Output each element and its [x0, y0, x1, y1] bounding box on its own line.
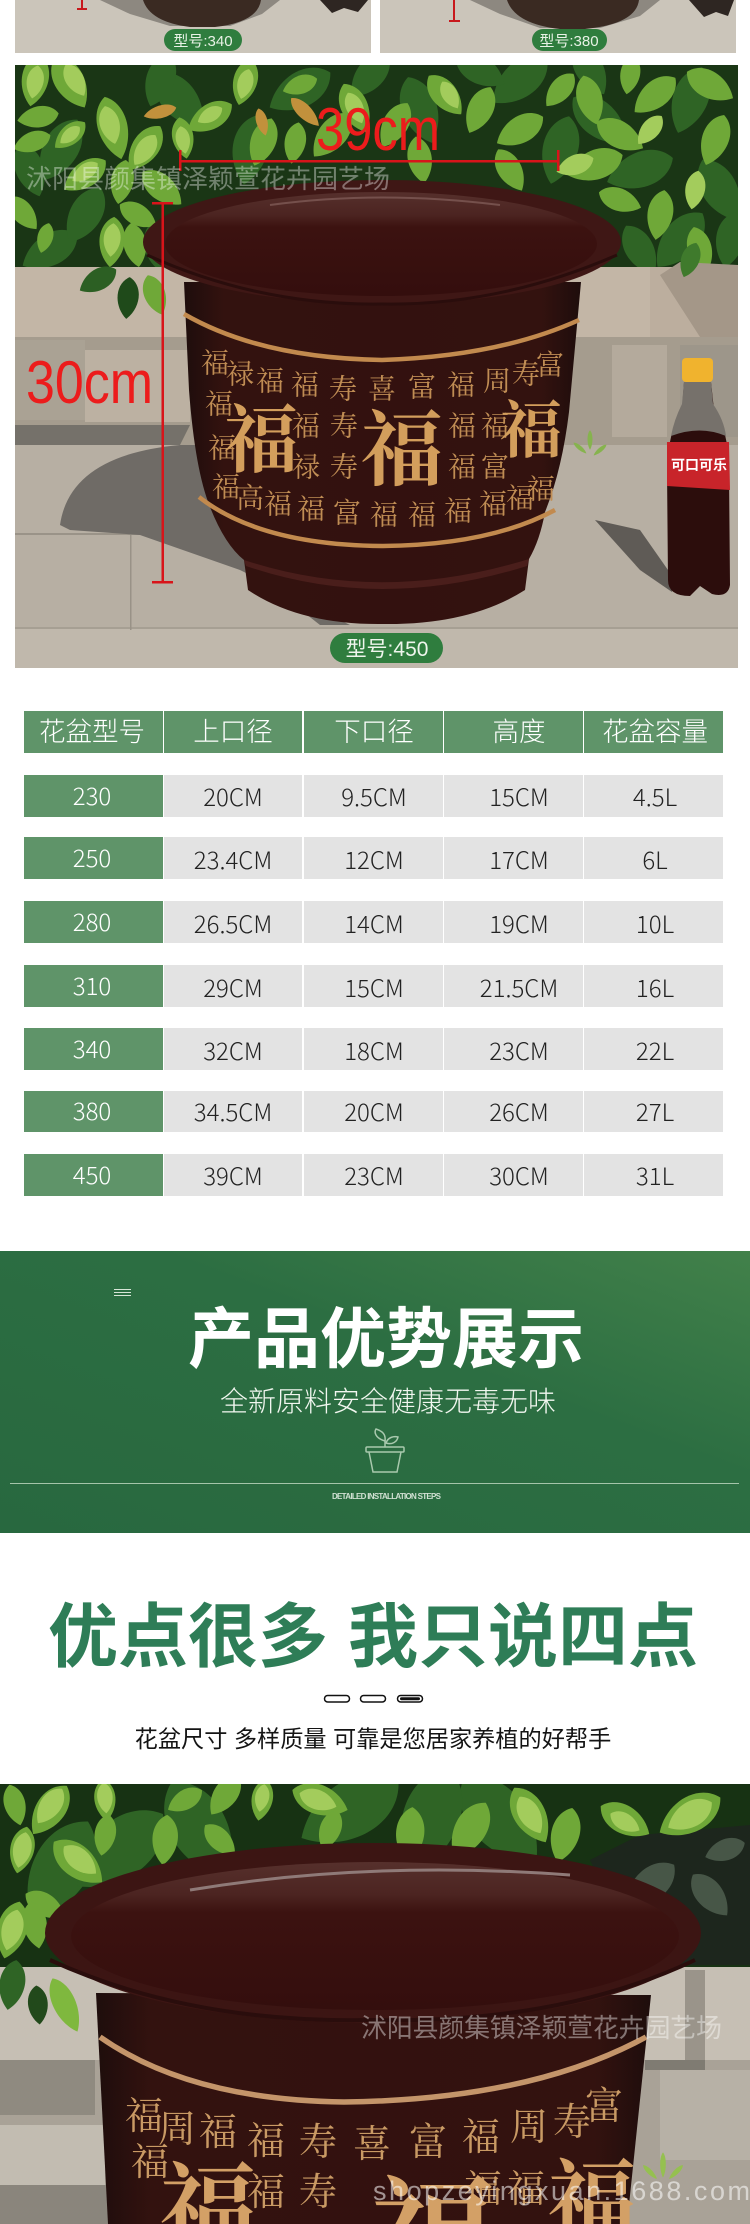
row 310: 310 [73, 967, 111, 1002]
row 250: 250 [73, 839, 111, 874]
gold characters: 福 [448, 452, 476, 484]
stone wall [0, 1967, 750, 2224]
pot rim [143, 180, 621, 304]
gold characters: 福 [201, 348, 229, 380]
table header: 上口径 [193, 717, 273, 747]
row 450: 23CM [344, 1157, 404, 1192]
banner: product advantages [0, 1251, 750, 1533]
heading: four advantages: 优点很多 [48, 1598, 328, 1676]
row 230: 9.5CM [341, 778, 407, 813]
dimension 39cm: 39cm [316, 96, 440, 163]
gold characters: 福 [212, 472, 240, 504]
gold characters: 福 [199, 2112, 237, 2154]
foliage over wall [75, 240, 705, 320]
gold characters: 福 [506, 482, 534, 514]
table header: 花盆型号 [39, 717, 145, 747]
gold characters: 福 [361, 406, 443, 496]
row 450 [24, 1154, 723, 1196]
gold characters: 寿 [512, 358, 540, 390]
gold characters: 寿 [299, 2172, 337, 2214]
gold characters: 福 [247, 2121, 285, 2163]
icon: small bars [114, 1289, 131, 1296]
row 380: 20CM [344, 1093, 404, 1128]
gold characters [201, 348, 564, 532]
gold characters: 富 [536, 350, 564, 382]
column dividers [163, 775, 584, 1196]
gold characters: 福 [264, 488, 292, 520]
icon: cola bottle [667, 358, 730, 596]
row 310: 21.5CM [480, 969, 558, 1004]
gold characters: 禄 [292, 452, 320, 484]
gold characters: 福 [125, 2096, 163, 2138]
sapling [643, 2152, 683, 2179]
gold characters: 周 [483, 366, 511, 398]
gold characters: 富 [409, 2122, 447, 2164]
gold characters: 周 [158, 2109, 196, 2151]
gold characters: 寿 [330, 410, 358, 442]
gold characters: 寿 [329, 374, 357, 406]
row 340 [24, 1028, 723, 1070]
watermark: 沭阳县颜集镇泽颖萱花卉园艺场 [26, 164, 390, 194]
row 250: 12CM [344, 841, 404, 876]
leaves over wall [0, 1960, 79, 2032]
dimension 30cm: 30cm [26, 349, 153, 416]
gold characters: 福 [297, 494, 325, 526]
row 250: 17CM [489, 841, 549, 876]
gold characters: 福 [462, 2117, 500, 2159]
row 310 [24, 965, 723, 1007]
table header [24, 711, 723, 753]
watermark: company: 沭阳县颜集镇泽颖萱花卉园艺场 [361, 2013, 722, 2043]
heading: four advantages [48, 1598, 698, 1676]
foliage [15, 65, 738, 267]
row 280: 280 [73, 903, 111, 938]
gold characters: 福 [291, 370, 319, 402]
table header: 花盆容量 [602, 717, 708, 747]
row 230: 230 [73, 777, 111, 812]
label: model 380 [532, 29, 607, 51]
row 230 [24, 775, 723, 817]
row 230: 4.5L [633, 778, 677, 813]
row 380: 27L [636, 1093, 674, 1128]
row 380 [24, 1091, 723, 1132]
row 280: 10L [636, 905, 674, 940]
row 310: 15CM [344, 969, 404, 1004]
gold characters: 福 [131, 2142, 169, 2184]
gold characters: 福 [205, 388, 233, 420]
gold characters: 喜 [368, 374, 396, 406]
gold characters: 福 [370, 500, 398, 532]
row 250: 6L [642, 841, 668, 876]
icon: cola bottle: 可口可乐 [671, 457, 727, 473]
pot body [184, 282, 581, 624]
gold characters: 福 [500, 398, 562, 466]
row 380: 380 [73, 1092, 111, 1127]
row 280: 14CM [344, 905, 404, 940]
gold characters: 福 [408, 500, 436, 532]
pot rim [45, 1843, 701, 2023]
row 340: 22L [636, 1032, 674, 1067]
icon: potted plant [366, 1429, 404, 1472]
gold characters: 福 [256, 366, 284, 398]
gold characters: 禄 [226, 358, 254, 390]
row 340: 32CM [203, 1032, 263, 1067]
row 450: 39CM [203, 1157, 263, 1192]
row 380: 34.5CM [194, 1093, 272, 1128]
row 230: 15CM [489, 778, 549, 813]
label: model 380: 型号:380 [539, 33, 599, 50]
heading: four advantages: 我只说四点 [348, 1598, 698, 1676]
row 310: 16L [636, 969, 674, 1004]
gold characters: 福 [464, 2169, 502, 2211]
label: model 450 [330, 633, 443, 663]
panel: main photo model 450 [1, 39, 750, 668]
row 280 [24, 901, 723, 943]
pavement [15, 445, 738, 668]
table: size specifications [24, 711, 723, 1196]
gold characters: 周 [510, 2107, 548, 2149]
gold characters: 富 [333, 498, 361, 530]
gold characters: 喜 [353, 2124, 391, 2166]
stone wall [15, 262, 738, 445]
label: model 340: 型号:340 [173, 33, 233, 50]
gold characters: 福 [444, 496, 472, 528]
row 450: 31L [636, 1157, 674, 1192]
gold band [100, 2037, 646, 2102]
row 280: 26.5CM [194, 905, 272, 940]
gold characters: 福 [507, 2169, 545, 2211]
gold characters: 福 [224, 401, 298, 483]
gold characters: 福 [527, 474, 555, 506]
table header: 下口径 [334, 717, 414, 747]
row 340: 23CM [489, 1032, 549, 1067]
row 450: 30CM [489, 1157, 549, 1192]
row 250 [24, 837, 723, 879]
row 450: 450 [73, 1156, 111, 1191]
row 280: 19CM [489, 905, 549, 940]
banner subtitle: 全新原料安全健康无毒无味 [220, 1386, 556, 1417]
pot [45, 1843, 701, 2224]
sapling on wall [574, 430, 606, 456]
row 230: 20CM [203, 778, 263, 813]
gold characters [125, 2086, 636, 2224]
row 340: 18CM [344, 1032, 404, 1067]
pot [143, 180, 621, 624]
gold characters: 富 [408, 372, 436, 404]
gold characters: 福 [481, 410, 509, 442]
gold characters: 福 [447, 370, 475, 402]
gold characters: 福 [479, 488, 507, 520]
panel: photo model 380 [380, 0, 736, 53]
shaded foliage right [590, 1825, 750, 1965]
gold characters: 福 [448, 410, 476, 442]
gold characters: 福 [208, 432, 236, 464]
watermark: url: shopzeyingxuan.1688.com [373, 2176, 750, 2206]
panel: photo model 340 [15, 0, 371, 53]
row 380: 26CM [489, 1093, 549, 1128]
pagination pills [324, 1696, 422, 1702]
gold characters: 富 [585, 2086, 623, 2128]
gold bands [184, 314, 579, 360]
gold characters: 福 [292, 410, 320, 442]
gold characters: 高 [236, 482, 264, 514]
gold characters: 寿 [299, 2122, 337, 2164]
label: model 450: 型号:450 [346, 638, 428, 661]
gold characters: 福 [247, 2172, 285, 2214]
banner small caption: DETAILED INSTALLATION STEPS [332, 1492, 442, 1501]
banner title: 产品优势展示 [188, 1302, 584, 1376]
foliage [0, 1784, 745, 1958]
row 340: 340 [73, 1030, 111, 1065]
gold characters: 寿 [553, 2102, 591, 2144]
label: model 340 [164, 29, 242, 51]
pot body [96, 1993, 651, 2224]
divider line [10, 1483, 739, 1484]
tagline: 花盆尺寸 多样质量 可靠是您居家养植的好帮手 [135, 1726, 611, 1752]
row 250: 23.4CM [194, 841, 272, 876]
row 310: 29CM [203, 969, 263, 1004]
table header: 高度 [492, 717, 546, 747]
gold characters: 富 [481, 452, 509, 484]
gold characters: 寿 [330, 452, 358, 484]
panel: bottom pot photo [0, 1758, 750, 2224]
